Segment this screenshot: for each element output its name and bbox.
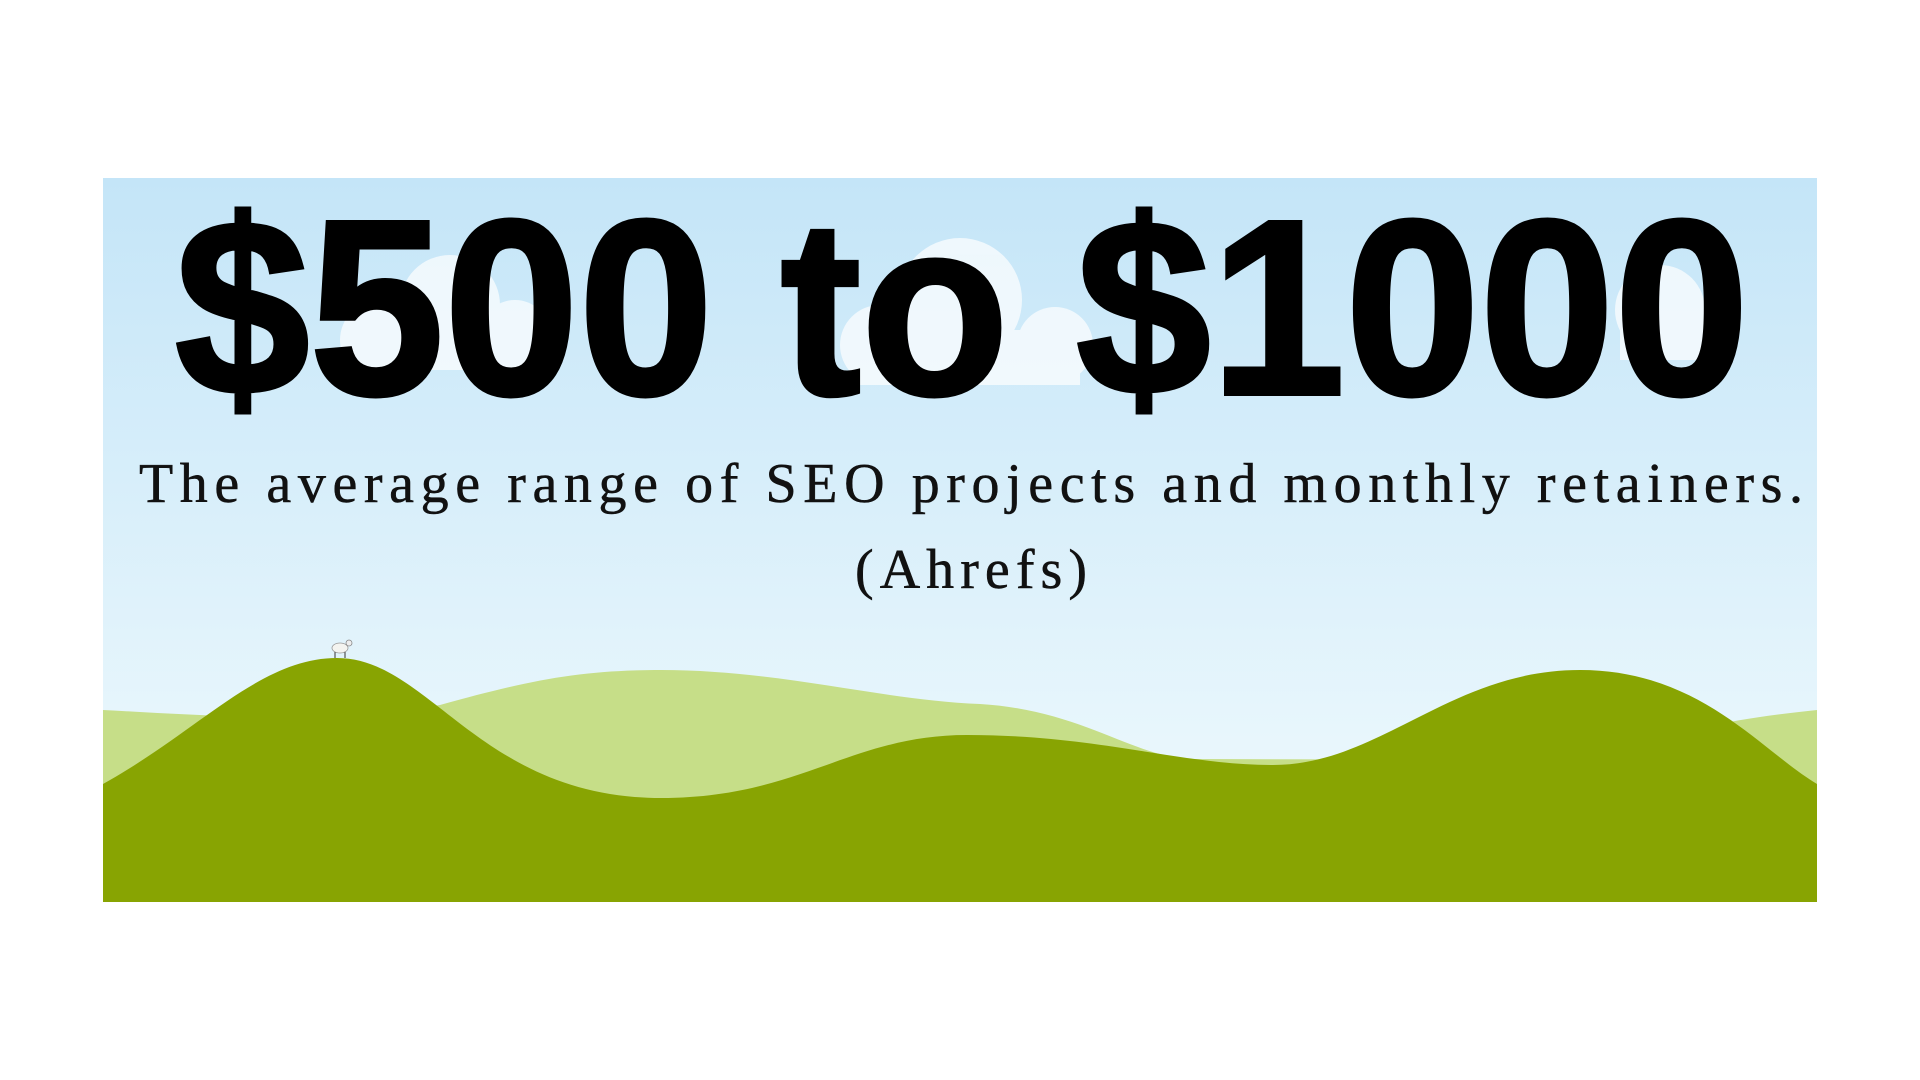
panel: sky background: [103, 178, 1817, 902]
icon: sheep: [332, 640, 352, 658]
title: $500 to $1000: [175, 168, 1749, 447]
dark green hills: [103, 658, 1817, 902]
source: (Ahrefs): [855, 539, 1087, 601]
clouds: [340, 238, 1720, 385]
subtitle: The average range of SEO projects and monthly retainers.: [139, 453, 1803, 515]
infographic panel: [103, 178, 1817, 902]
light green hills: [103, 670, 1817, 798]
